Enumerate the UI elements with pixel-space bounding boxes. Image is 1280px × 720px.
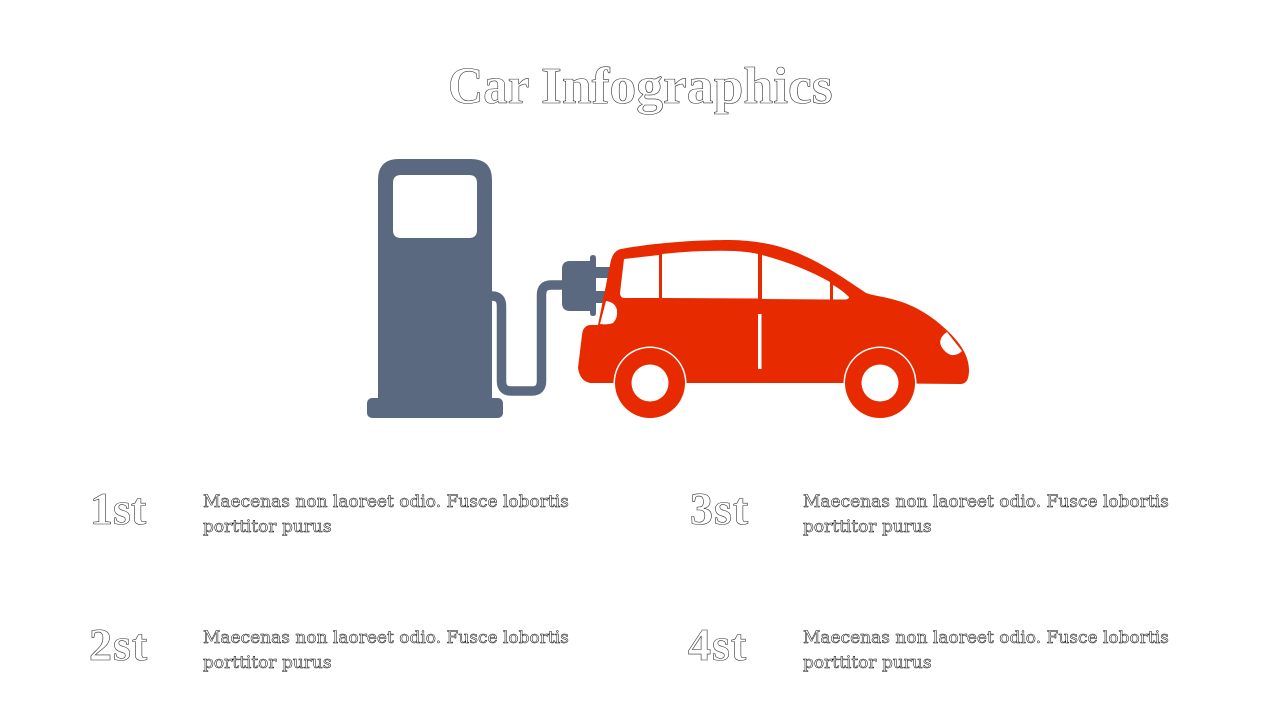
- item 4 number: 4st: [688, 619, 747, 670]
- rear light: [600, 301, 617, 324]
- item 1 text: Maecenas non laoreet odio. Fusce lobortis: [203, 492, 569, 512]
- item 3 text: porttitor purus: [803, 517, 932, 537]
- item 4 text: Maecenas non laoreet odio. Fusce lobortis: [803, 628, 1169, 648]
- headlight: [940, 332, 962, 355]
- item 4 text: [803, 628, 1169, 673]
- item 2 text: Maecenas non laoreet odio. Fusce lobortis: [203, 628, 569, 648]
- icon: cable and plug: [492, 255, 616, 391]
- item 4 text: porttitor purus: [803, 653, 932, 673]
- item 2 text: [203, 628, 569, 673]
- door line: [758, 314, 762, 369]
- rear wheel: [610, 346, 690, 424]
- item 2 number: 2st: [89, 619, 148, 670]
- front wheel: [840, 346, 920, 424]
- title: Car: [448, 58, 529, 115]
- icon: electric car: [578, 240, 969, 424]
- item 2 text: porttitor purus: [203, 653, 332, 673]
- title: Infographics: [541, 58, 833, 115]
- item 1 text: [203, 492, 569, 537]
- item 3 number: 3st: [690, 483, 749, 534]
- item 3 text: Maecenas non laoreet odio. Fusce lobortis: [803, 492, 1169, 512]
- item 3 text: [803, 492, 1169, 537]
- icon: charging pump: [367, 159, 503, 418]
- item 1 text: porttitor purus: [203, 517, 332, 537]
- windows: [620, 251, 849, 300]
- item 1 number: 1st: [90, 483, 146, 534]
